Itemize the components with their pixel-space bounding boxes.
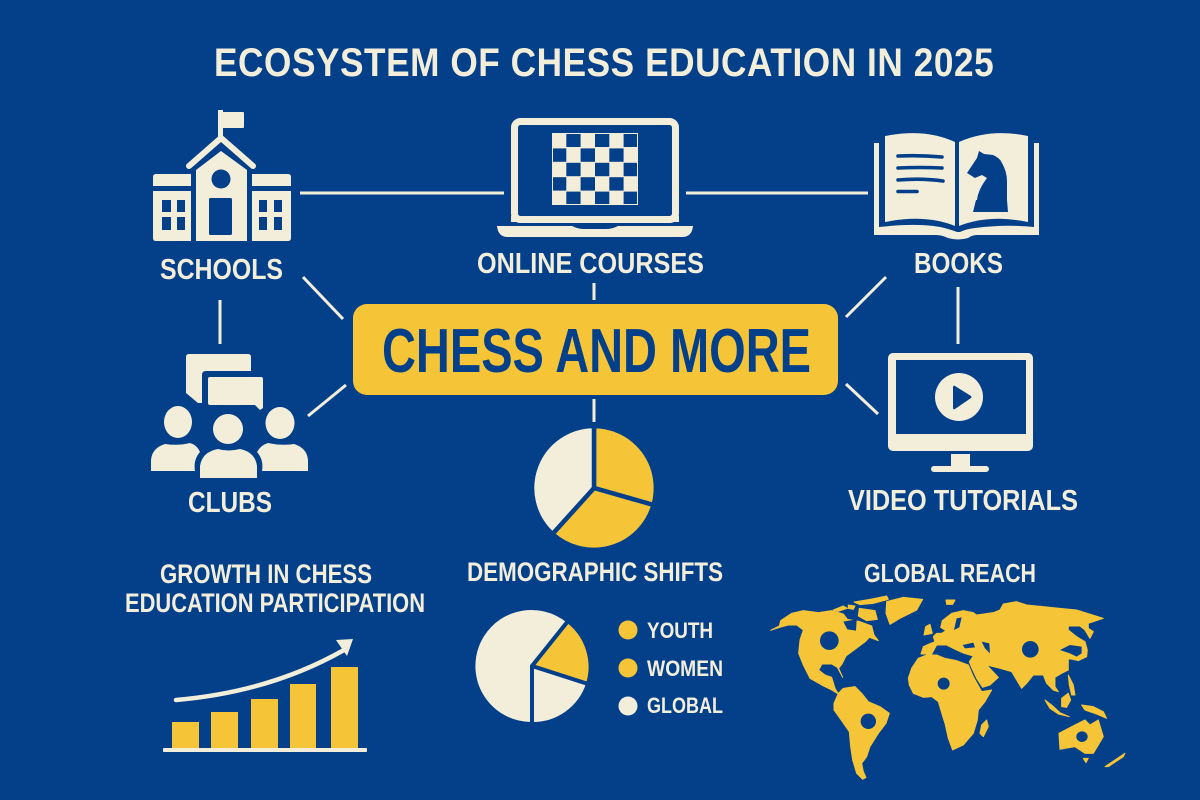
label: video tutorials: VIDEO TUTORIALS (848, 485, 1078, 517)
world map (771, 596, 1125, 779)
central banner (353, 304, 838, 395)
label: books: BOOKS (914, 248, 1003, 280)
label: clubs: CLUBS (188, 487, 272, 519)
icon: school (153, 110, 291, 241)
title: ECOSYSTEM OF CHESS EDUCATION IN 2025 (214, 40, 994, 84)
heading: growth in chess education participation: EDUCATION PARTICIPATION (125, 588, 425, 618)
legend (618, 618, 723, 718)
icon: video monitor (888, 353, 1033, 472)
icon: laptop with chessboard (497, 122, 693, 237)
icon: clubs group (151, 354, 308, 478)
legend: GLOBAL (647, 693, 723, 718)
pie chart: upper (532, 426, 656, 550)
pie chart: lower (473, 608, 591, 724)
central banner: CHESS AND MORE (382, 317, 811, 386)
label: demographic shifts: DEMOGRAPHIC SHIFTS (467, 557, 723, 587)
heading: growth in chess education participation (125, 559, 425, 618)
legend: YOUTH (647, 618, 713, 643)
heading: global reach: GLOBAL REACH (864, 558, 1036, 588)
icon: book with knight (874, 133, 1039, 240)
legend: WOMEN (647, 656, 723, 681)
label: online courses: ONLINE COURSES (477, 248, 704, 280)
label: schools: SCHOOLS (160, 254, 283, 286)
heading: growth in chess education participation: GROWTH IN CHESS (160, 559, 372, 589)
bar chart: growth (163, 639, 367, 752)
